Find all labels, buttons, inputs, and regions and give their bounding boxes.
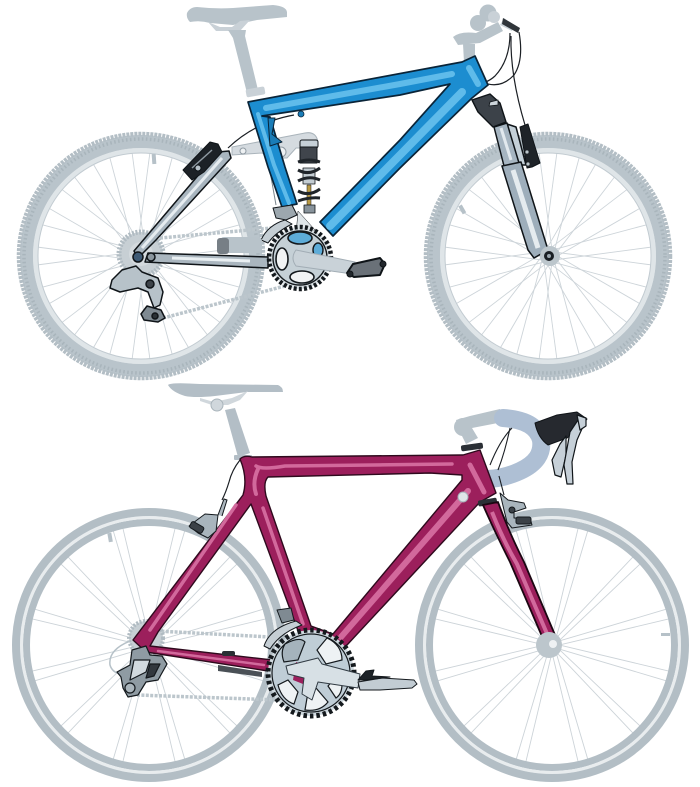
front fork (mountain): [494, 123, 548, 258]
front v-brake (mountain): [520, 124, 540, 168]
frame (mountain, blue): [248, 56, 488, 236]
cassette (mountain): [119, 232, 163, 276]
valve stems (road): [107, 533, 670, 636]
chain (road): [137, 631, 280, 700]
front derailleur (road): [264, 608, 302, 649]
road bike: [16, 383, 685, 778]
rear wheel (mountain): [19, 134, 263, 378]
crank arm (road): [286, 658, 360, 700]
pivot mount: [268, 118, 282, 146]
mountain bike: [19, 4, 670, 378]
rear wheel (road): [16, 512, 282, 778]
brake cables (road): [222, 428, 512, 500]
saddle (mountain): [187, 5, 287, 31]
valve stems: [152, 154, 466, 214]
front fork crown (mountain): [472, 94, 506, 127]
pedal (road): [358, 670, 417, 690]
crank arm (mountain): [293, 250, 355, 274]
water bottle boss and derailleur levers: [218, 651, 262, 677]
front wheel (road): [419, 512, 685, 778]
rear v-brake: [183, 142, 222, 180]
chain (mountain): [160, 228, 285, 318]
rear derailleur (road): [117, 646, 167, 697]
front derailleur mount: [261, 205, 315, 243]
shifter hood (road): [535, 412, 587, 445]
saddle (road): [168, 383, 283, 411]
chainrings (mountain): [269, 227, 331, 289]
crank arm far side pedal (mountain): [217, 237, 262, 254]
brake levers (road): [552, 415, 586, 484]
frame highlights: [258, 68, 478, 226]
frame highlights: [150, 464, 484, 665]
seat post (mountain): [228, 30, 266, 98]
cable guide: [298, 111, 304, 117]
chain stay: [133, 252, 268, 268]
frame (road, magenta): [133, 450, 496, 671]
derailleur cable loop: [110, 641, 130, 674]
seat post (road): [225, 408, 252, 460]
handlebar (road): [488, 418, 541, 479]
pedal (mountain): [347, 258, 386, 277]
rear suspension link: [232, 133, 318, 158]
front wheel (mountain): [426, 134, 670, 378]
stem (road): [454, 409, 503, 444]
front hub (road): [536, 632, 562, 658]
brake cables (mountain): [228, 32, 525, 205]
front hub (mountain): [540, 246, 560, 266]
headset rings (road): [461, 442, 497, 507]
cassette (road): [129, 621, 163, 655]
front fork (road): [483, 502, 558, 648]
handlebar and stem (mountain): [453, 4, 520, 62]
front brake caliper (road): [500, 493, 532, 528]
rear shock: [298, 140, 320, 213]
rear derailleur (mountain): [110, 266, 165, 322]
seat stay: [134, 151, 231, 258]
chainrings (road): [268, 630, 354, 716]
rear brake caliper (road): [189, 499, 227, 538]
